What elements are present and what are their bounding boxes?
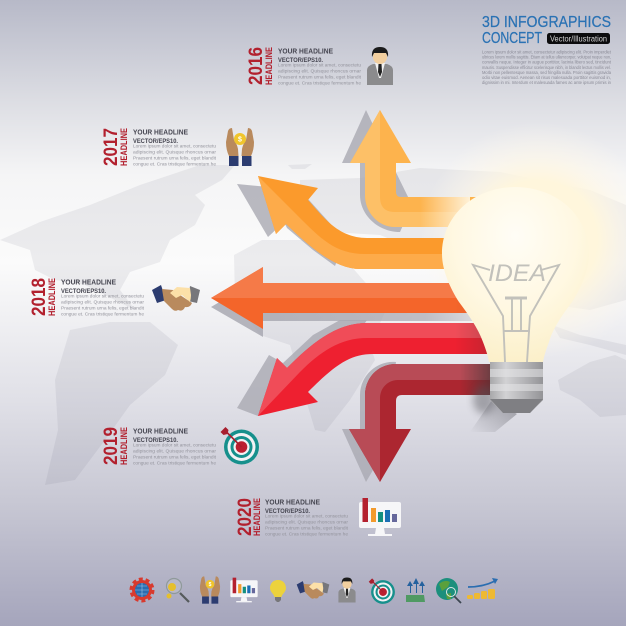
timeline block: 2018: Lorem ipsum dolor sit amet, consectetu bbox=[61, 294, 144, 300]
timeline block: 2016: HEADLINE bbox=[264, 47, 275, 85]
timeline block: 2017: congue et. Cras tristique fermentum he bbox=[133, 162, 216, 168]
icon: target small bbox=[369, 578, 395, 604]
timeline block: 2018: 2018 bbox=[29, 278, 50, 316]
timeline block: 2017: Lorem ipsum dolor sit amet, consectetu bbox=[133, 144, 216, 150]
icon: yellow bulb small bbox=[270, 580, 286, 602]
timeline block: 2017: YOUR HEADLINE bbox=[133, 128, 188, 136]
timeline block: 2019: 2019 bbox=[101, 427, 122, 465]
timeline block: 2016: VECTOR/EPS10. bbox=[278, 57, 323, 64]
timeline block: 2016 bbox=[246, 46, 362, 86]
timeline block: 2017: 2017 bbox=[101, 128, 122, 166]
timeline block: 2019: adipiscing elit. Quisque rhoncus ornar bbox=[133, 448, 216, 454]
timeline block: 2019: VECTOR/EPS10. bbox=[133, 437, 178, 444]
intro paragraph: odio vitae euismod. Aenean sit risus malesuada porttitor euismod in, bbox=[482, 75, 611, 80]
timeline block: 2020: Lorem ipsum dolor sit amet, consectetu bbox=[265, 514, 348, 520]
timeline block: 2020: VECTOR/EPS10. bbox=[265, 508, 310, 515]
icon: money with up arrows bbox=[406, 578, 425, 602]
bulb screw base bbox=[490, 362, 543, 413]
timeline block: 2020: YOUR HEADLINE bbox=[265, 498, 320, 506]
timeline block: 2017: adipiscing elit. Quisque rhoncus ornar bbox=[133, 150, 216, 156]
title: CONCEPT bbox=[482, 30, 542, 47]
icon: monitor chart small bbox=[230, 578, 258, 602]
icon: businessman small bbox=[338, 577, 356, 603]
timeline block: 2016: Praesent rutrum urna felis, eget blandit bbox=[278, 74, 362, 80]
timeline block: 2018: VECTOR/EPS10. bbox=[61, 288, 106, 295]
icon: monitor bar chart bbox=[359, 498, 401, 536]
arrow 2: orange, 2017 bbox=[258, 176, 490, 269]
timeline block: 2018: HEADLINE bbox=[47, 278, 58, 316]
world map bbox=[0, 164, 626, 485]
timeline block: 2020 bbox=[235, 498, 349, 538]
timeline block: 2019: Lorem ipsum dolor sit amet, consectetu bbox=[133, 442, 216, 448]
bulb cast shadow on arrows bbox=[445, 238, 517, 432]
IDEA lettering: IDEA bbox=[488, 260, 546, 287]
timeline block: 2018: congue et. Cras tristique fermentum he bbox=[61, 312, 144, 318]
intro paragraph bbox=[482, 50, 612, 85]
bulb glow bbox=[420, 122, 626, 358]
timeline block: 2017: VECTOR/EPS10. bbox=[133, 138, 178, 145]
arrow 3: orange-red, 2018 bbox=[211, 267, 490, 329]
arrow 1: yellow, 2016 bbox=[350, 110, 490, 227]
timeline block: 2019: YOUR HEADLINE bbox=[133, 426, 188, 436]
light bulb bbox=[442, 187, 589, 413]
arrow shadows bbox=[211, 110, 480, 482]
timeline block: 2020: HEADLINE bbox=[252, 498, 263, 536]
timeline block: 2017: HEADLINE bbox=[119, 128, 130, 166]
timeline block: 2019 bbox=[101, 426, 217, 466]
arrow 4: red, 2019 bbox=[258, 323, 490, 416]
timeline block: 2017: Praesent rutrum urna felis, eget blandit bbox=[133, 156, 217, 162]
timeline block: 2020: Praesent rutrum urna felis, eget blandit bbox=[265, 526, 349, 532]
filament bbox=[473, 265, 559, 362]
title bbox=[482, 14, 611, 47]
timeline block: 2019: congue et. Cras tristique fermentum he bbox=[133, 460, 216, 466]
timeline block: 2020: congue et. Cras tristique fermentum he bbox=[265, 532, 348, 538]
icon: handshake bbox=[152, 285, 200, 311]
timeline block: 2016: YOUR HEADLINE bbox=[278, 46, 333, 56]
timeline block: 2018: YOUR HEADLINE bbox=[61, 278, 116, 286]
timeline block: 2018: adipiscing elit. Quisque rhoncus ornar bbox=[61, 300, 144, 306]
icon: growth chart with coins bbox=[467, 578, 498, 599]
timeline block: 2018: Praesent rutrum urna felis, eget blandit bbox=[61, 306, 145, 312]
timeline block: 2020: adipiscing elit. Quisque rhoncus ornar bbox=[265, 520, 348, 526]
icon: hands with coin small bbox=[200, 576, 220, 604]
icon: businessman bbox=[367, 47, 393, 85]
timeline block: 2017 bbox=[101, 128, 217, 168]
badge: vector illustration: Vector/Illustration bbox=[550, 34, 607, 44]
intro paragraph: dignissim in mi. Interdum et malesuada fames ac ante ipsum primis in bbox=[482, 80, 612, 85]
arrow 5: dark red, 2020 bbox=[349, 364, 490, 482]
timeline block: 2019: HEADLINE bbox=[119, 427, 130, 465]
timeline block: 2018 bbox=[29, 278, 145, 318]
intro paragraph: Lorem ipsum dolor sit amet, consectetur adipiscing elit. Proin imperdiet bbox=[482, 50, 612, 54]
timeline block: 2020: 2020 bbox=[235, 498, 256, 536]
icon: globe with magnifier bbox=[436, 578, 461, 603]
icon: magnifier with coin bbox=[166, 578, 189, 602]
intro paragraph: Morbi non pellentesque massa, sed fringilla nulla. Proin sagittis gravida bbox=[482, 70, 612, 75]
timeline block: 2016: adipiscing elit. Quisque rhoncus ornar bbox=[278, 68, 361, 74]
icon: hands holding coin bbox=[226, 128, 254, 166]
bottom icon row bbox=[131, 576, 498, 604]
timeline block: 2019: Praesent rutrum urna felis, eget blandit bbox=[133, 454, 217, 460]
bulb glass bbox=[442, 187, 589, 362]
timeline block: 2016: congue et. Cras tristique fermentum he bbox=[278, 80, 361, 86]
intro paragraph: ultrices lorem mollis sagittis. Etiam at tellus ullamcorper, volutpat neque non, bbox=[482, 55, 611, 60]
icon: handshake small bbox=[297, 581, 329, 599]
intro paragraph: mauris. Suspendisse efficitur scelerisque nibh, in blandit lectus mollis vel. bbox=[482, 65, 611, 70]
title: 3D INFOGRAPHICS bbox=[482, 14, 611, 31]
intro paragraph: convallis neque. Integer in augue porttitor, lacinia libero sed, tincidunt bbox=[482, 60, 612, 65]
icon: target with arrow bbox=[220, 427, 259, 464]
timeline block: 2016: 2016 bbox=[246, 47, 267, 85]
icon: gear with globe bbox=[131, 579, 153, 601]
timeline block: 2016: Lorem ipsum dolor sit amet, consectetu bbox=[278, 62, 361, 68]
